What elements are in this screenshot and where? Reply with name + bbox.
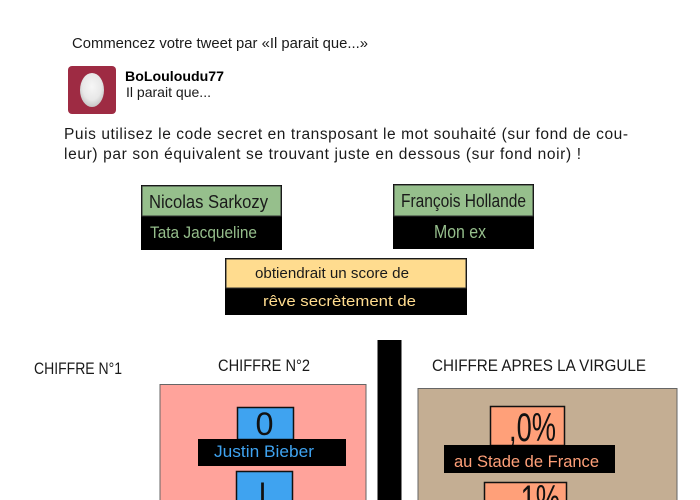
instructions text: Puis utilisez le code secret en transposant le mot souhaité (sur fond de cou- [64, 126, 628, 143]
heading: chiffre apres la virgule: CHIFFRE APRES LA VIRGULE [432, 356, 646, 375]
code word: au Stade de France: au Stade de France [454, 452, 599, 471]
heading: chiffre 1: CHIFFRE N°1 [34, 359, 122, 378]
panel: chiffre 2 [160, 384, 366, 500]
digit 0: 0 [256, 406, 274, 442]
value ,0% [490, 406, 564, 450]
panel: chiffre apres la virgule [418, 388, 677, 500]
instructions text: leur) par son équivalent se trouvant juste en dessous (sur fond noir) ! [64, 146, 581, 163]
code card: Nicolas Sarkozy: Tata Jacqueline [150, 223, 257, 242]
code card: obtiendrait un score de [225, 258, 467, 315]
code card: Nicolas Sarkozy [141, 185, 282, 250]
code word: au Stade de France [444, 445, 615, 473]
code card: obtiendrait un score de: obtiendrait un score de [255, 265, 409, 282]
black divider bar [378, 340, 402, 500]
code card: François Hollande: Mon ex [434, 222, 486, 242]
digit 1 [236, 472, 292, 500]
instructions text [64, 126, 628, 163]
code card: Nicolas Sarkozy: Nicolas Sarkozy [149, 192, 268, 212]
tweet text: Il parait que... [126, 84, 211, 100]
tweet example [68, 66, 224, 114]
value ,1% [484, 478, 566, 500]
code card: obtiendrait un score de: rêve secrètement de [263, 293, 416, 310]
code card: François Hollande [393, 184, 534, 249]
code word: Justin Bieber: Justin Bieber [214, 442, 314, 461]
tweet username: BoLouloudu77 [125, 68, 224, 84]
code word: Justin Bieber [198, 439, 346, 466]
digit 0 [238, 406, 294, 442]
intro text: Commencez votre tweet par «Il parait que...» [72, 35, 368, 52]
heading: chiffre 2: CHIFFRE N°2 [218, 356, 310, 375]
code card: François Hollande: François Hollande [401, 191, 526, 211]
value ,0%: ,0% [509, 406, 556, 450]
icon: egg avatar [68, 66, 116, 114]
